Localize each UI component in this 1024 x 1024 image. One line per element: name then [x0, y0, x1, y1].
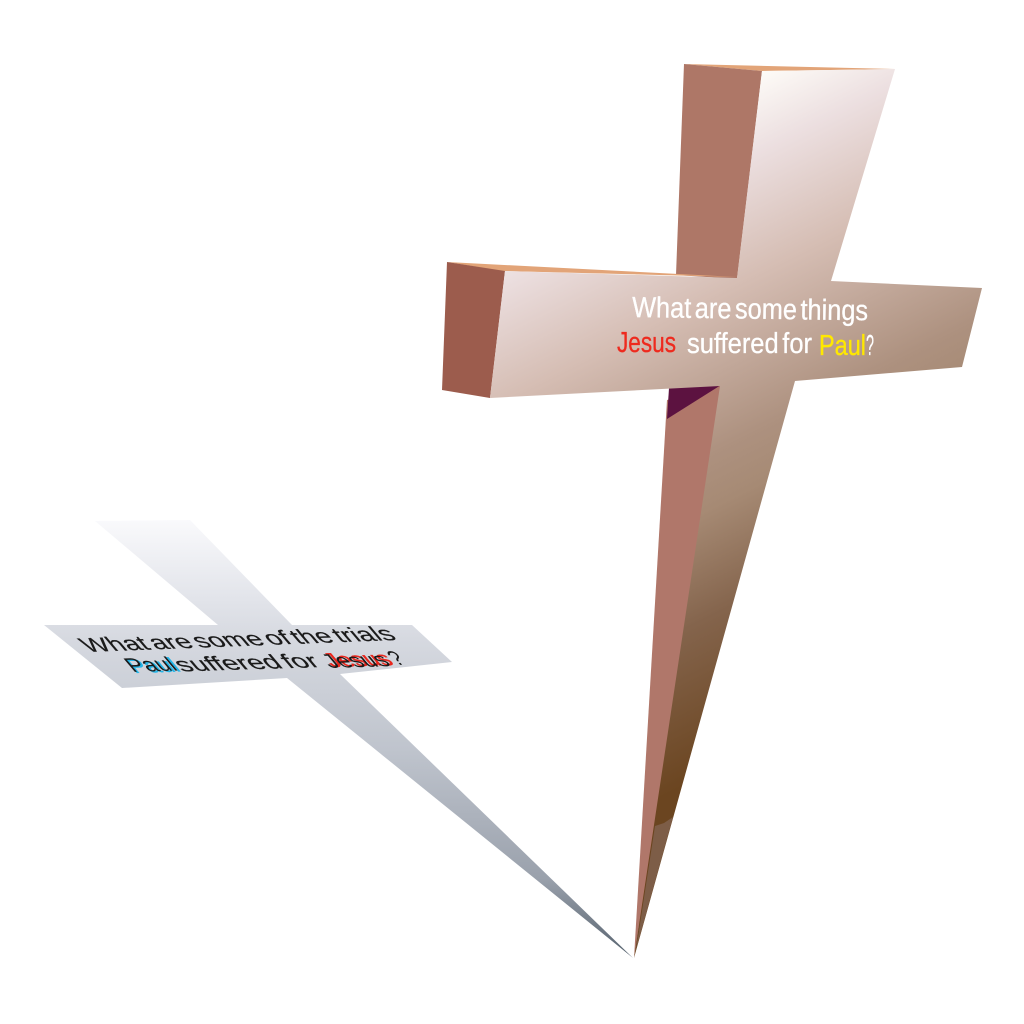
shadow question text: What are some of the trials — [74, 623, 402, 657]
shadow question text — [74, 623, 411, 678]
shadow question text: ? — [382, 648, 411, 670]
question text on the cross: suffered for — [687, 328, 812, 360]
shadow question text: suffered for — [168, 650, 326, 676]
question text on the cross: Paul — [819, 330, 866, 362]
top face of upper beam — [684, 64, 895, 71]
cross — [442, 64, 982, 958]
shadow question text: Paul — [121, 654, 186, 678]
left side of lower beam — [634, 385, 722, 958]
question text on the cross: Jesus — [617, 327, 676, 359]
front face — [490, 69, 982, 958]
shadow question text: Paul — [119, 654, 183, 677]
top face of arm — [447, 262, 737, 277]
underside shadow of arm — [667, 385, 721, 419]
cross: ? — [866, 330, 874, 362]
question text on the cross: What are some things — [632, 292, 868, 327]
left end of arm — [442, 262, 505, 398]
left side of upper beam — [676, 64, 762, 279]
lower tip shading — [636, 817, 673, 950]
cross shadow on the ground — [44, 520, 633, 958]
shadow question text: Jesus — [318, 648, 399, 672]
question text on the cross — [617, 292, 874, 362]
shadow question text: Jesus — [316, 649, 396, 673]
